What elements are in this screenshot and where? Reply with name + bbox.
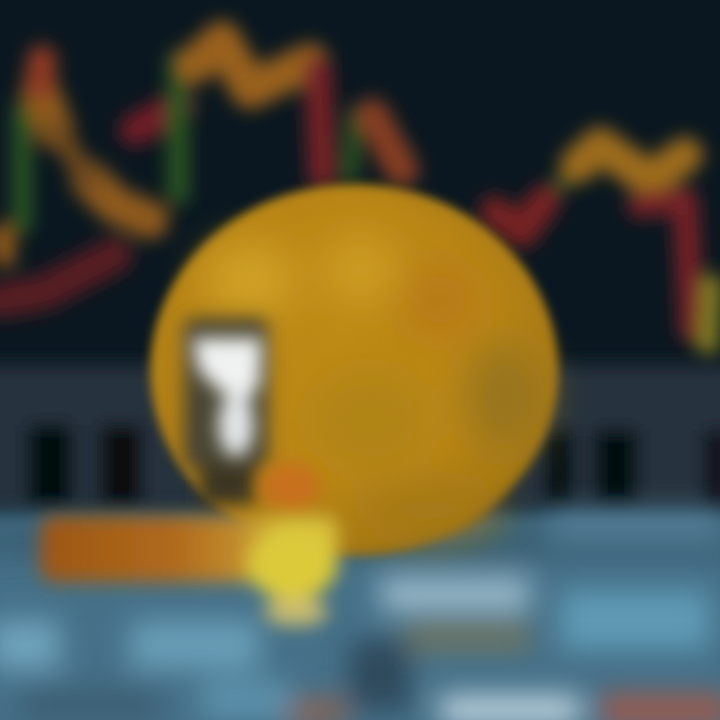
chart: left dark red lower trace <box>0 255 115 300</box>
building band <box>0 365 720 510</box>
hourglass frame <box>184 318 268 468</box>
hourglass icon <box>184 318 268 505</box>
chart: right rising red <box>495 200 545 232</box>
chart: right red drop <box>640 200 692 330</box>
hourglass glass bottom <box>218 393 254 457</box>
chart: orange descending left trace <box>40 90 55 130</box>
dark columns right <box>545 430 573 505</box>
hourglass glass <box>192 338 262 457</box>
orange glow at coin base <box>260 463 320 511</box>
chart: red rising segment <box>135 105 180 130</box>
chart: red drop <box>318 70 322 175</box>
chart: middle red orange hump <box>372 115 402 170</box>
bar reflection <box>264 598 328 626</box>
chart: right orange peak <box>578 145 685 180</box>
bar highlight <box>248 529 336 601</box>
gold coin <box>150 184 558 556</box>
chart: far left orange spot <box>2 235 4 255</box>
hourglass glass top <box>192 338 262 400</box>
golden bar <box>40 516 338 626</box>
coin surface mottling <box>205 235 545 535</box>
dark columns left <box>28 425 72 505</box>
chart: green wicks <box>22 60 590 225</box>
hourglass base shadow <box>200 465 255 505</box>
chart: far right olive wick <box>708 285 712 345</box>
floor: blue reflective surface <box>0 510 720 720</box>
floor patches <box>0 510 720 720</box>
chart: top orange peak <box>195 40 310 90</box>
market chart line <box>0 40 712 345</box>
